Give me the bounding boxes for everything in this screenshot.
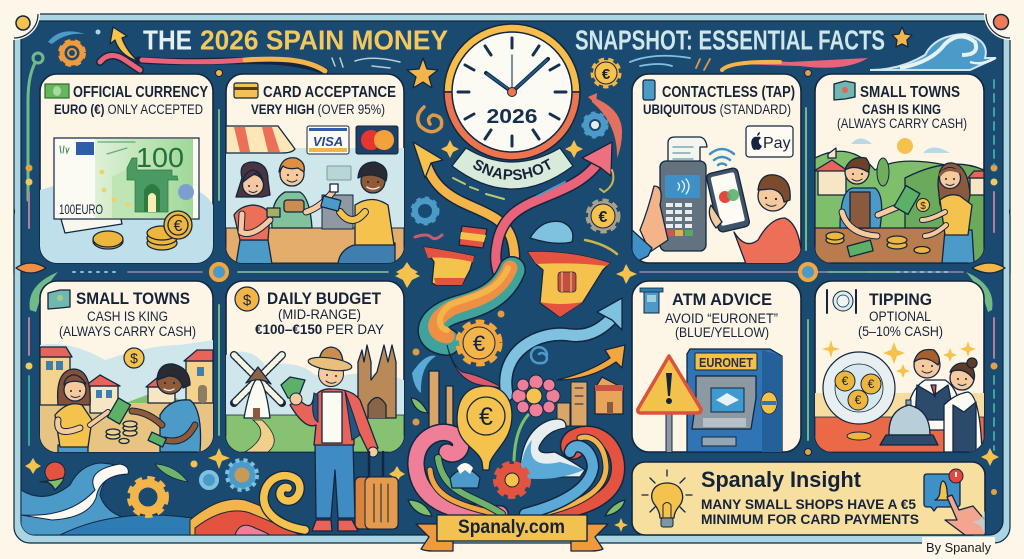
ATM machine: EURONET <box>699 356 753 370</box>
logo: visa <box>307 126 349 154</box>
heading: small towns: SMALL TOWNS <box>860 84 960 101</box>
decoration: top left ornaments <box>28 27 400 200</box>
icon: banknote <box>45 84 69 98</box>
flag and Spain maps <box>424 226 610 317</box>
person: man <box>132 364 201 452</box>
person: woman <box>55 369 131 455</box>
heading: daily budget: DAILY BUDGET <box>267 289 382 308</box>
icon: smartphone <box>643 80 655 100</box>
text: avoid euronet: AVOID “EURONET” <box>665 311 778 326</box>
illustration: windmill and landscape <box>226 345 404 452</box>
coin balloon: € <box>479 403 493 431</box>
logo: apple pay: Pay <box>763 135 791 152</box>
title: 2026 SPAIN MONEY <box>200 24 448 56</box>
centre top ornaments: € <box>599 209 608 226</box>
person: waitress <box>944 358 982 452</box>
clock: 2026 <box>486 106 538 128</box>
text: percentage: (5–10% CASH) <box>858 324 943 339</box>
text: cash is king: CASH IS KING <box>87 309 168 324</box>
text: card minimum line one: MANY SMALL SHOPS HAVE A €5 <box>701 497 916 512</box>
smartphone with card <box>706 167 750 233</box>
text: always carry cash: (ALWAYS CARRY CASH) <box>59 324 196 339</box>
icon: dollar coin: $ <box>243 292 252 309</box>
illustration: euro notes and coins: 100EURO <box>59 201 103 217</box>
person: man with phone <box>734 175 802 264</box>
left swirl <box>416 432 502 514</box>
heading: tipping: TIPPING <box>869 290 932 309</box>
heading: small towns: SMALL TOWNS <box>76 289 190 308</box>
coins <box>106 421 137 444</box>
panel: card acceptance <box>226 74 404 264</box>
panel: contactless tap <box>632 74 802 264</box>
coins on plate: € <box>842 374 849 388</box>
title: THE <box>143 24 192 56</box>
decoration: bottom left ornaments and wave <box>21 448 405 535</box>
right swirl <box>525 433 618 514</box>
illustration: euro notes and coins: 100 <box>136 142 184 173</box>
illustration: town market cash payment: $ <box>920 201 926 212</box>
icon: light bulb <box>642 470 692 527</box>
text: blue yellow: (BLUE/YELLOW) <box>675 325 769 340</box>
heading: official currency: OFFICIAL CURRENCY <box>73 84 208 101</box>
illustration: town cash exchange <box>40 340 213 455</box>
panel: small towns (top) <box>814 74 984 263</box>
text: ubiquitous: UBIQUITOUS (STANDARD) <box>643 102 791 117</box>
panel: official currency <box>40 74 213 263</box>
clock <box>444 24 580 160</box>
text: mid-range: (MID-RANGE) <box>278 307 361 322</box>
coins and cash on table <box>826 232 930 257</box>
title: SNAPSHOT: ESSENTIAL FACTS <box>575 24 885 56</box>
title <box>143 24 885 56</box>
illustration: euronet machine and warning <box>638 349 782 455</box>
panel: daily budget <box>226 281 404 452</box>
centre top ornaments: € <box>602 66 611 83</box>
text: cash is king: CASH IS KING <box>862 102 941 117</box>
centre top ornaments <box>395 58 637 288</box>
person: customer woman <box>234 162 280 264</box>
decoration: top right wave <box>630 27 996 70</box>
icon: ATM <box>640 288 663 313</box>
heading: contactless: CONTACTLESS (TAP) <box>662 84 795 101</box>
person: waiter <box>907 350 962 430</box>
illustration: tip plate and staff <box>815 340 984 452</box>
person: shopkeeper <box>272 158 338 228</box>
text: card minimum line two: MINIMUM FOR CARD PAYMENTS <box>701 512 919 527</box>
callout: Spanaly insight <box>632 462 985 535</box>
panel: ATM advice <box>632 281 801 455</box>
illustration: euro notes and coins: € <box>174 218 183 235</box>
illustration: town cash exchange: $ <box>130 350 138 366</box>
arrows: gold and pink crossing <box>413 142 612 285</box>
warning sign <box>638 356 701 455</box>
logo: visa: VISA <box>313 134 343 149</box>
logo: mastercard <box>356 126 398 154</box>
person: vendor <box>840 158 920 236</box>
coins on plate: € <box>868 377 875 391</box>
icon: notification bell and tapping hand <box>924 469 985 535</box>
snapshot banner: SNAPSHOT <box>473 158 551 180</box>
panel: tipping <box>815 281 984 452</box>
text: very high: VERY HIGH (OVER 95%) <box>251 102 385 117</box>
text: euro only: EURO (€) ONLY ACCEPTED <box>54 102 203 117</box>
icon: dollar coin <box>235 287 259 311</box>
receipt <box>667 136 708 160</box>
attribution: By Spanaly: By Spanaly <box>926 541 992 555</box>
heading: card acceptance: CARD ACCEPTANCE <box>263 84 396 101</box>
icon: wireless waves <box>710 149 734 165</box>
icon: map <box>834 81 855 100</box>
ATM machine <box>687 349 782 452</box>
badge: Spanaly.com ribbon <box>416 515 608 551</box>
payment terminal <box>660 161 706 251</box>
rainbow swirls, centre: € <box>473 331 485 356</box>
illustration: contactless payment <box>632 126 802 264</box>
text: always carry cash: (ALWAYS CARRY CASH) <box>837 116 967 131</box>
heading: ATM advice: ATM ADVICE <box>672 290 772 309</box>
person: customer man <box>321 162 395 264</box>
icon: map <box>48 290 70 309</box>
person: woman buyer <box>922 163 974 263</box>
text: daily amount: €100–€150 PER DAY <box>255 322 384 337</box>
windmill <box>234 355 282 419</box>
illustration: town market cash payment <box>814 138 984 263</box>
person: tourist with suitcase <box>281 347 398 531</box>
attribution: By Spanaly <box>922 537 995 559</box>
icon: plate and cutlery <box>827 290 856 313</box>
cathedral <box>358 345 396 418</box>
logo: apple pay <box>746 126 793 157</box>
heading: Spanaly Insight: Spanaly Insight <box>701 467 862 492</box>
service bell <box>880 400 938 445</box>
illustration: shop counter with card payment <box>226 126 404 264</box>
coin balloon <box>457 386 512 470</box>
illustration: euro notes and coins <box>40 138 213 263</box>
panel: small towns (bottom) <box>40 281 213 455</box>
text: optional: OPTIONAL <box>869 309 931 324</box>
rainbow swirls, centre <box>408 268 628 532</box>
icon: credit card <box>234 83 258 98</box>
decoration: middle band and side rails <box>16 70 1005 495</box>
coins on plate: € <box>855 393 862 407</box>
badge: Spanaly.com ribbon: Spanaly.com <box>458 517 565 538</box>
snapshot banner <box>451 147 574 190</box>
coins on plate <box>835 371 881 410</box>
hand holding terminal <box>640 186 668 252</box>
